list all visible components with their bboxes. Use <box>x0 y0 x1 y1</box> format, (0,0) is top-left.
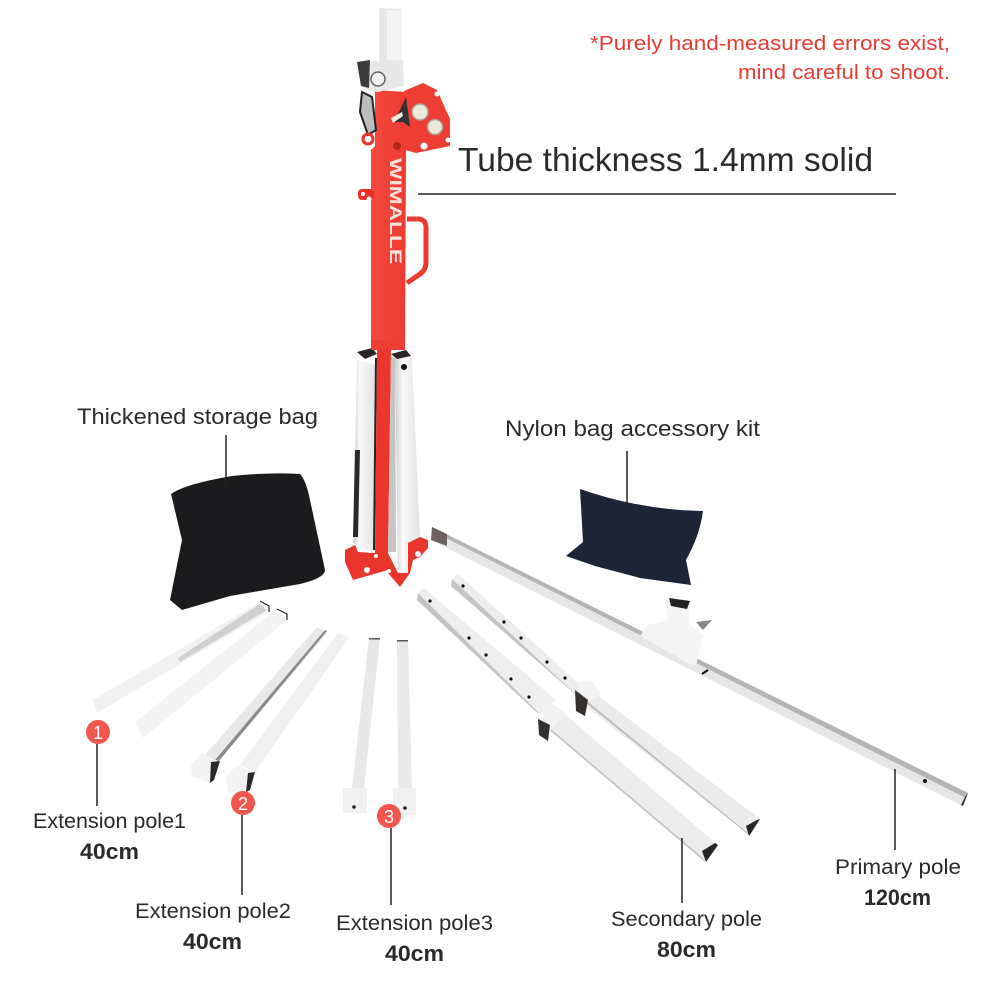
callout: extension pole 3 <box>336 804 493 966</box>
carry handle <box>407 219 426 283</box>
callout: extension pole 1 <box>33 720 186 864</box>
heading: tube thickness: Tube thickness 1.4mm solid <box>458 141 873 178</box>
nylon accessory bag <box>566 489 703 585</box>
dark tube openings <box>357 340 411 359</box>
extension pole 2 pair <box>191 627 349 792</box>
brand lettering: WIMALLE <box>386 158 405 264</box>
callout: extension pole 3: 40cm <box>385 941 444 966</box>
callout: primary pole: Primary pole <box>835 856 961 879</box>
right leg <box>395 358 420 573</box>
callout: extension pole 1: Extension pole1 <box>33 810 186 833</box>
side clips <box>358 134 401 202</box>
callout: extension pole 2: 2 <box>238 794 248 814</box>
callout: primary pole: 120cm <box>864 885 931 910</box>
pole mount <box>640 598 712 674</box>
left leg <box>353 360 375 553</box>
red disclaimer note <box>590 33 950 84</box>
callout: secondary pole: 80cm <box>657 937 716 962</box>
top inner tube <box>379 8 402 62</box>
callout: extension pole 1: 1 <box>93 723 103 743</box>
red disclaimer note: mind careful to shoot. <box>738 62 950 84</box>
storage bag <box>170 473 325 610</box>
label: nylon bag: Nylon bag accessory kit <box>505 416 760 441</box>
callout: extension pole 2: 40cm <box>183 929 242 954</box>
label: storage bag: Thickened storage bag <box>77 404 318 429</box>
assembled stand <box>345 8 450 587</box>
callout: secondary pole: Secondary pole <box>611 908 762 931</box>
callout: extension pole 2 <box>135 791 291 954</box>
extension pole 1 pair <box>93 601 287 738</box>
callout: extension pole 2: Extension pole2 <box>135 900 291 923</box>
secondary pole front <box>417 588 718 862</box>
callout: extension pole 1: 40cm <box>80 839 139 864</box>
red main pole <box>371 90 406 350</box>
callout: primary pole <box>835 769 961 910</box>
primary pole <box>431 527 968 806</box>
extension pole 3 pair <box>343 638 416 815</box>
base holes <box>364 551 421 573</box>
callout: secondary pole <box>611 838 762 962</box>
red disclaimer note: *Purely hand-measured errors exist, <box>590 33 950 55</box>
secondary pole rear <box>451 574 760 836</box>
winch bracket <box>357 60 410 135</box>
callout: extension pole 3: 3 <box>384 807 394 827</box>
red base <box>345 537 428 587</box>
callout: extension pole 3: Extension pole3 <box>336 912 493 935</box>
central red tube <box>373 350 396 555</box>
red side plate <box>404 83 450 153</box>
